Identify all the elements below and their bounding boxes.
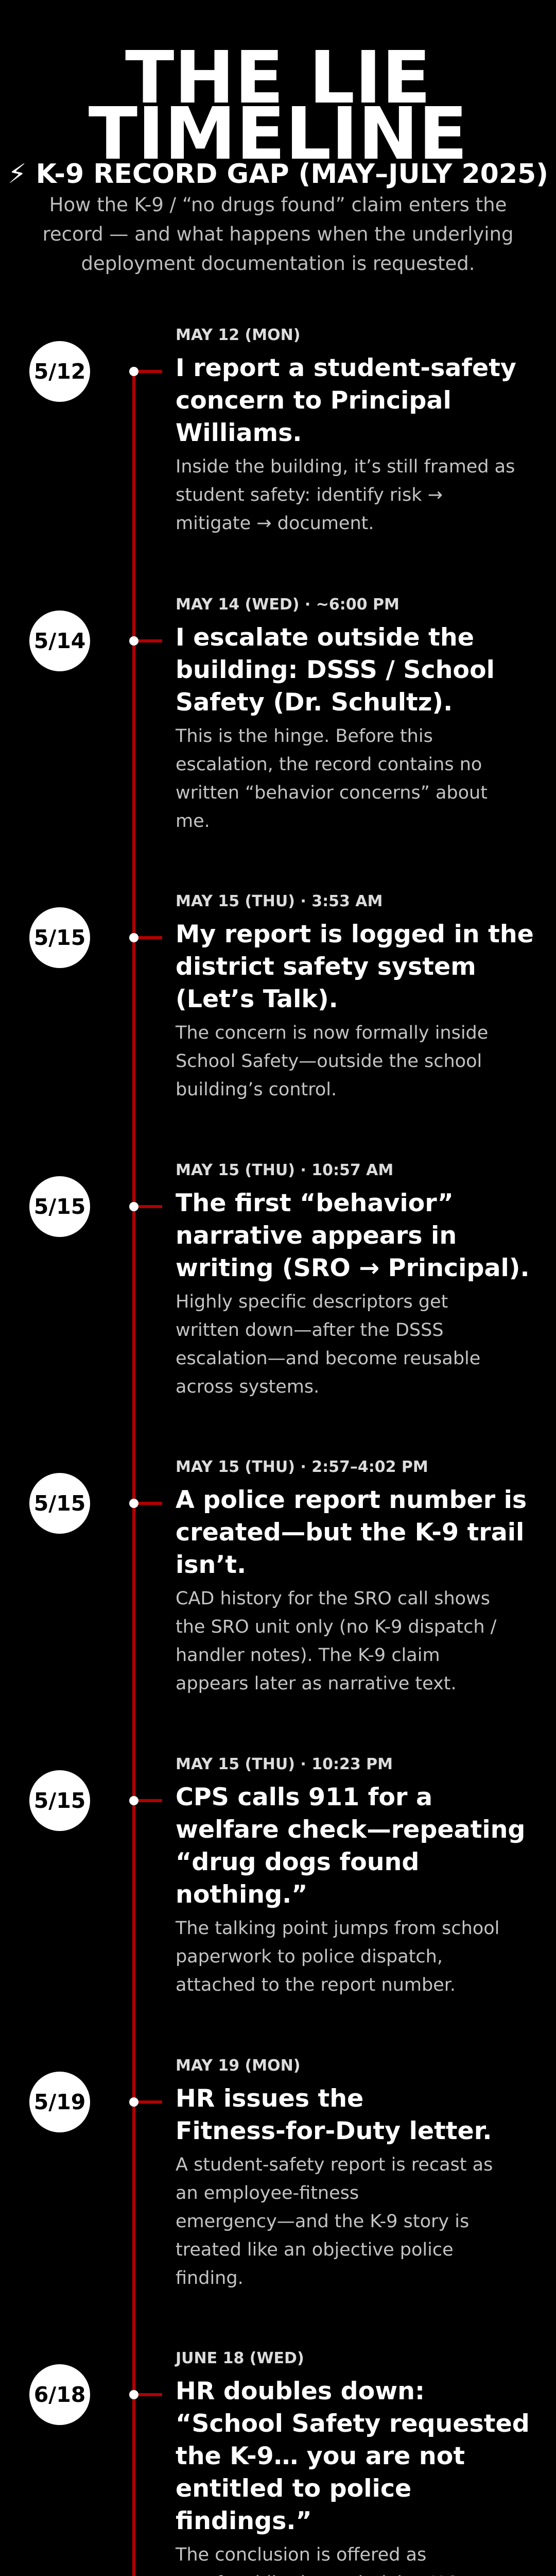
entry text: 5/15 2:57 PM: CAD history for the SRO call shows [176,1588,490,1609]
subtitle: ⚡ K-9 RECORD GAP (MAY–JULY 2025) [8,159,548,190]
entry: 6/18 [29,2349,530,2576]
entry text: 5/15 3:53 AM: district safety system [176,953,476,981]
entry text: 6/18: findings.” [176,2507,312,2535]
date badge: 5/15 [29,1473,90,1534]
entry text: 5/19: finding. [176,2268,244,2289]
entry text: 6/18: HR doubles down: [176,2377,425,2405]
date badge: 5/15 [29,1176,90,1237]
entry text: 5/15 10:23 PM: The talking point jumps from school [176,1918,499,1939]
entry text: 5/15 10:23 PM: paperwork to police dispatch, [176,1946,443,1967]
entry text: 5/15 3:53 AM [175,892,534,1100]
entry text: 5/14: written “behavior concerns” about [176,783,488,803]
entry text: 5/19: Fitness-for-Duty letter. [176,2117,492,2145]
entry text: 5/19: A student-safety report is recast as [176,2155,493,2175]
entry text: 5/15 10:57 AM: narrative appears in [176,1222,457,1250]
entry text: 5/12: MAY 12 (MON) [176,326,300,344]
date badge: 5/15: 5/15 [34,1788,85,1813]
entry: 5/15 10:57 AM [29,1161,530,1397]
entry text: 5/14: I escalate outside the [176,623,474,652]
entry text: 5/15 2:57 PM [176,1458,527,1694]
entry text: 5/15 10:23 PM: “drug dogs found [176,1848,419,1876]
entry text: 5/15 10:23 PM: CPS calls 911 for a [176,1783,432,1811]
entry text: 5/15 10:57 AM: MAY 15 (THU) · 10:57 AM [176,1161,393,1179]
entry text: 5/15 2:57 PM: isn’t. [176,1551,246,1579]
entry text: 6/18 [175,2349,530,2576]
entry text: 5/15 10:57 AM: across systems. [176,1377,319,1397]
entry text: 5/14: Safety (Dr. Schultz). [176,688,453,717]
entry text: 5/19: an employee-fitness [176,2183,359,2204]
entry text: 5/15 3:53 AM: building’s control. [176,1079,337,1100]
entry text: 5/15 2:57 PM: A police report number is [176,1486,527,1514]
date badge: 5/14 [29,611,90,671]
date badge: 5/14: 5/14 [34,629,85,653]
entry: 5/15 2:57 PM [29,1458,527,1694]
entry text: 5/15 3:53 AM: My report is logged in the [176,920,534,948]
entry: 5/19 [29,2057,493,2289]
entry text: 5/15 10:23 PM: welfare check—repeating [176,1816,525,1844]
date badge: 5/15 [29,907,90,968]
date badge: 6/18: 6/18 [34,2382,85,2407]
entry text: 6/18: the K-9… you are not [176,2442,465,2470]
entry: 5/15 3:53 AM [29,892,534,1100]
entry text: 5/14: building: DSSS / School [176,656,495,684]
entry text: 5/12 [176,326,516,534]
entry text: 5/15 2:57 PM: handler notes). The K-9 claim [176,1645,440,1666]
entry text: 5/19: HR issues the [176,2084,363,2113]
entry: 5/12 [29,326,516,534]
entry text: 6/18: The conclusion is offered as [176,2545,426,2565]
entry text: 5/15 2:57 PM: MAY 15 (THU) · 2:57–4:02 PM [176,1458,428,1476]
entry text: 5/14: me. [176,811,210,832]
entry text: 5/14: escalation, the record contains no [176,754,482,775]
entry text: 5/15 10:57 AM: escalation—and become reusable [176,1348,480,1369]
entry text: 5/12: mitigate → document. [176,513,374,534]
entry text: 5/15 3:53 AM: MAY 15 (THU) · 3:53 AM [176,892,383,910]
entry text: 5/12: concern to Principal [176,386,451,415]
date badge: 5/12 [29,341,90,402]
date badge: 6/18 [29,2364,90,2425]
entry text: 5/19: emergency—and the K-9 story is [176,2211,469,2232]
entry text: 5/14 [175,596,495,832]
title: TIMELINE [89,92,467,176]
entry text: 5/15 2:57 PM: created—but the K-9 trail [176,1518,524,1547]
date badge: 5/15: 5/15 [34,1194,85,1219]
intro description: How the K-9 / “no drugs found” claim enters the record — and what happens when the underlying deployment documentation is requested. [42,194,514,275]
date badge: 5/15 [29,1770,90,1831]
date badge: 5/15: 5/15 [34,925,85,950]
date badge: 5/15: 5/15 [34,1491,85,1516]
entry text: 5/15 10:57 AM: writing (SRO → Principal). [176,1254,530,1282]
timeline spine [132,371,135,2576]
entry text: 5/12: student safety: identify risk → [176,485,443,505]
entry text: 5/15 10:57 AM: written down—after the DSSS [176,1320,444,1341]
entry text: 5/15 3:53 AM: (Let’s Talk). [176,985,338,1013]
entry text: 5/14: MAY 14 (WED) · ~6:00 PM [176,596,399,614]
entry text: 5/15 10:57 AM: Highly specific descriptors get [176,1292,448,1312]
entry text: 6/18: JUNE 18 (WED) [176,2349,304,2367]
entry text: 5/15 10:57 AM: The first “behavior” [176,1189,454,1217]
entry text: 5/19: treated like an objective police [176,2240,454,2260]
entry text: 5/15 10:23 PM: attached to the report number. [176,1975,456,1995]
date badge: 5/19: 5/19 [34,2090,85,2114]
title [89,36,467,176]
entry text: 5/15 10:57 AM [176,1161,530,1397]
entry text: 5/15 3:53 AM: The concern is now formally inside [176,1023,488,1043]
entry text: 5/12: I report a student-safety [176,354,516,382]
date badge: 5/19 [29,2072,90,2132]
entry text: 5/15 10:23 PM: nothing.” [176,1880,307,1909]
entry text: 5/12: Williams. [176,419,302,447]
entry text: 5/15 10:23 PM: MAY 15 (THU) · 10:23 PM [176,1755,393,1773]
entry text: 5/14: This is the hinge. Before this [176,726,433,747]
entry text: 5/15 3:53 AM: School Safety—outside the school [176,1051,482,1072]
entry text: 5/15 2:57 PM: the SRO unit only (no K-9 dispatch / [176,1617,496,1637]
date badge: 5/12: 5/12 [34,359,85,384]
entry text: 5/15 10:23 PM [175,1755,525,1995]
title: THE LIE [125,36,431,120]
entry: 5/14 [29,596,495,832]
entry text: 6/18: “School Safety requested [176,2410,530,2438]
entry text: 5/19 [176,2057,493,2289]
entry text: 5/12: Inside the building, it’s still framed as [176,456,515,477]
entry text: 6/18: entitled to police [176,2475,411,2503]
entry: 5/15 10:23 PM [29,1755,525,1995]
entry text: 5/15 2:57 PM: appears later as narrative text. [176,1673,457,1694]
entry text: 5/19: MAY 19 (MON) [176,2057,300,2075]
